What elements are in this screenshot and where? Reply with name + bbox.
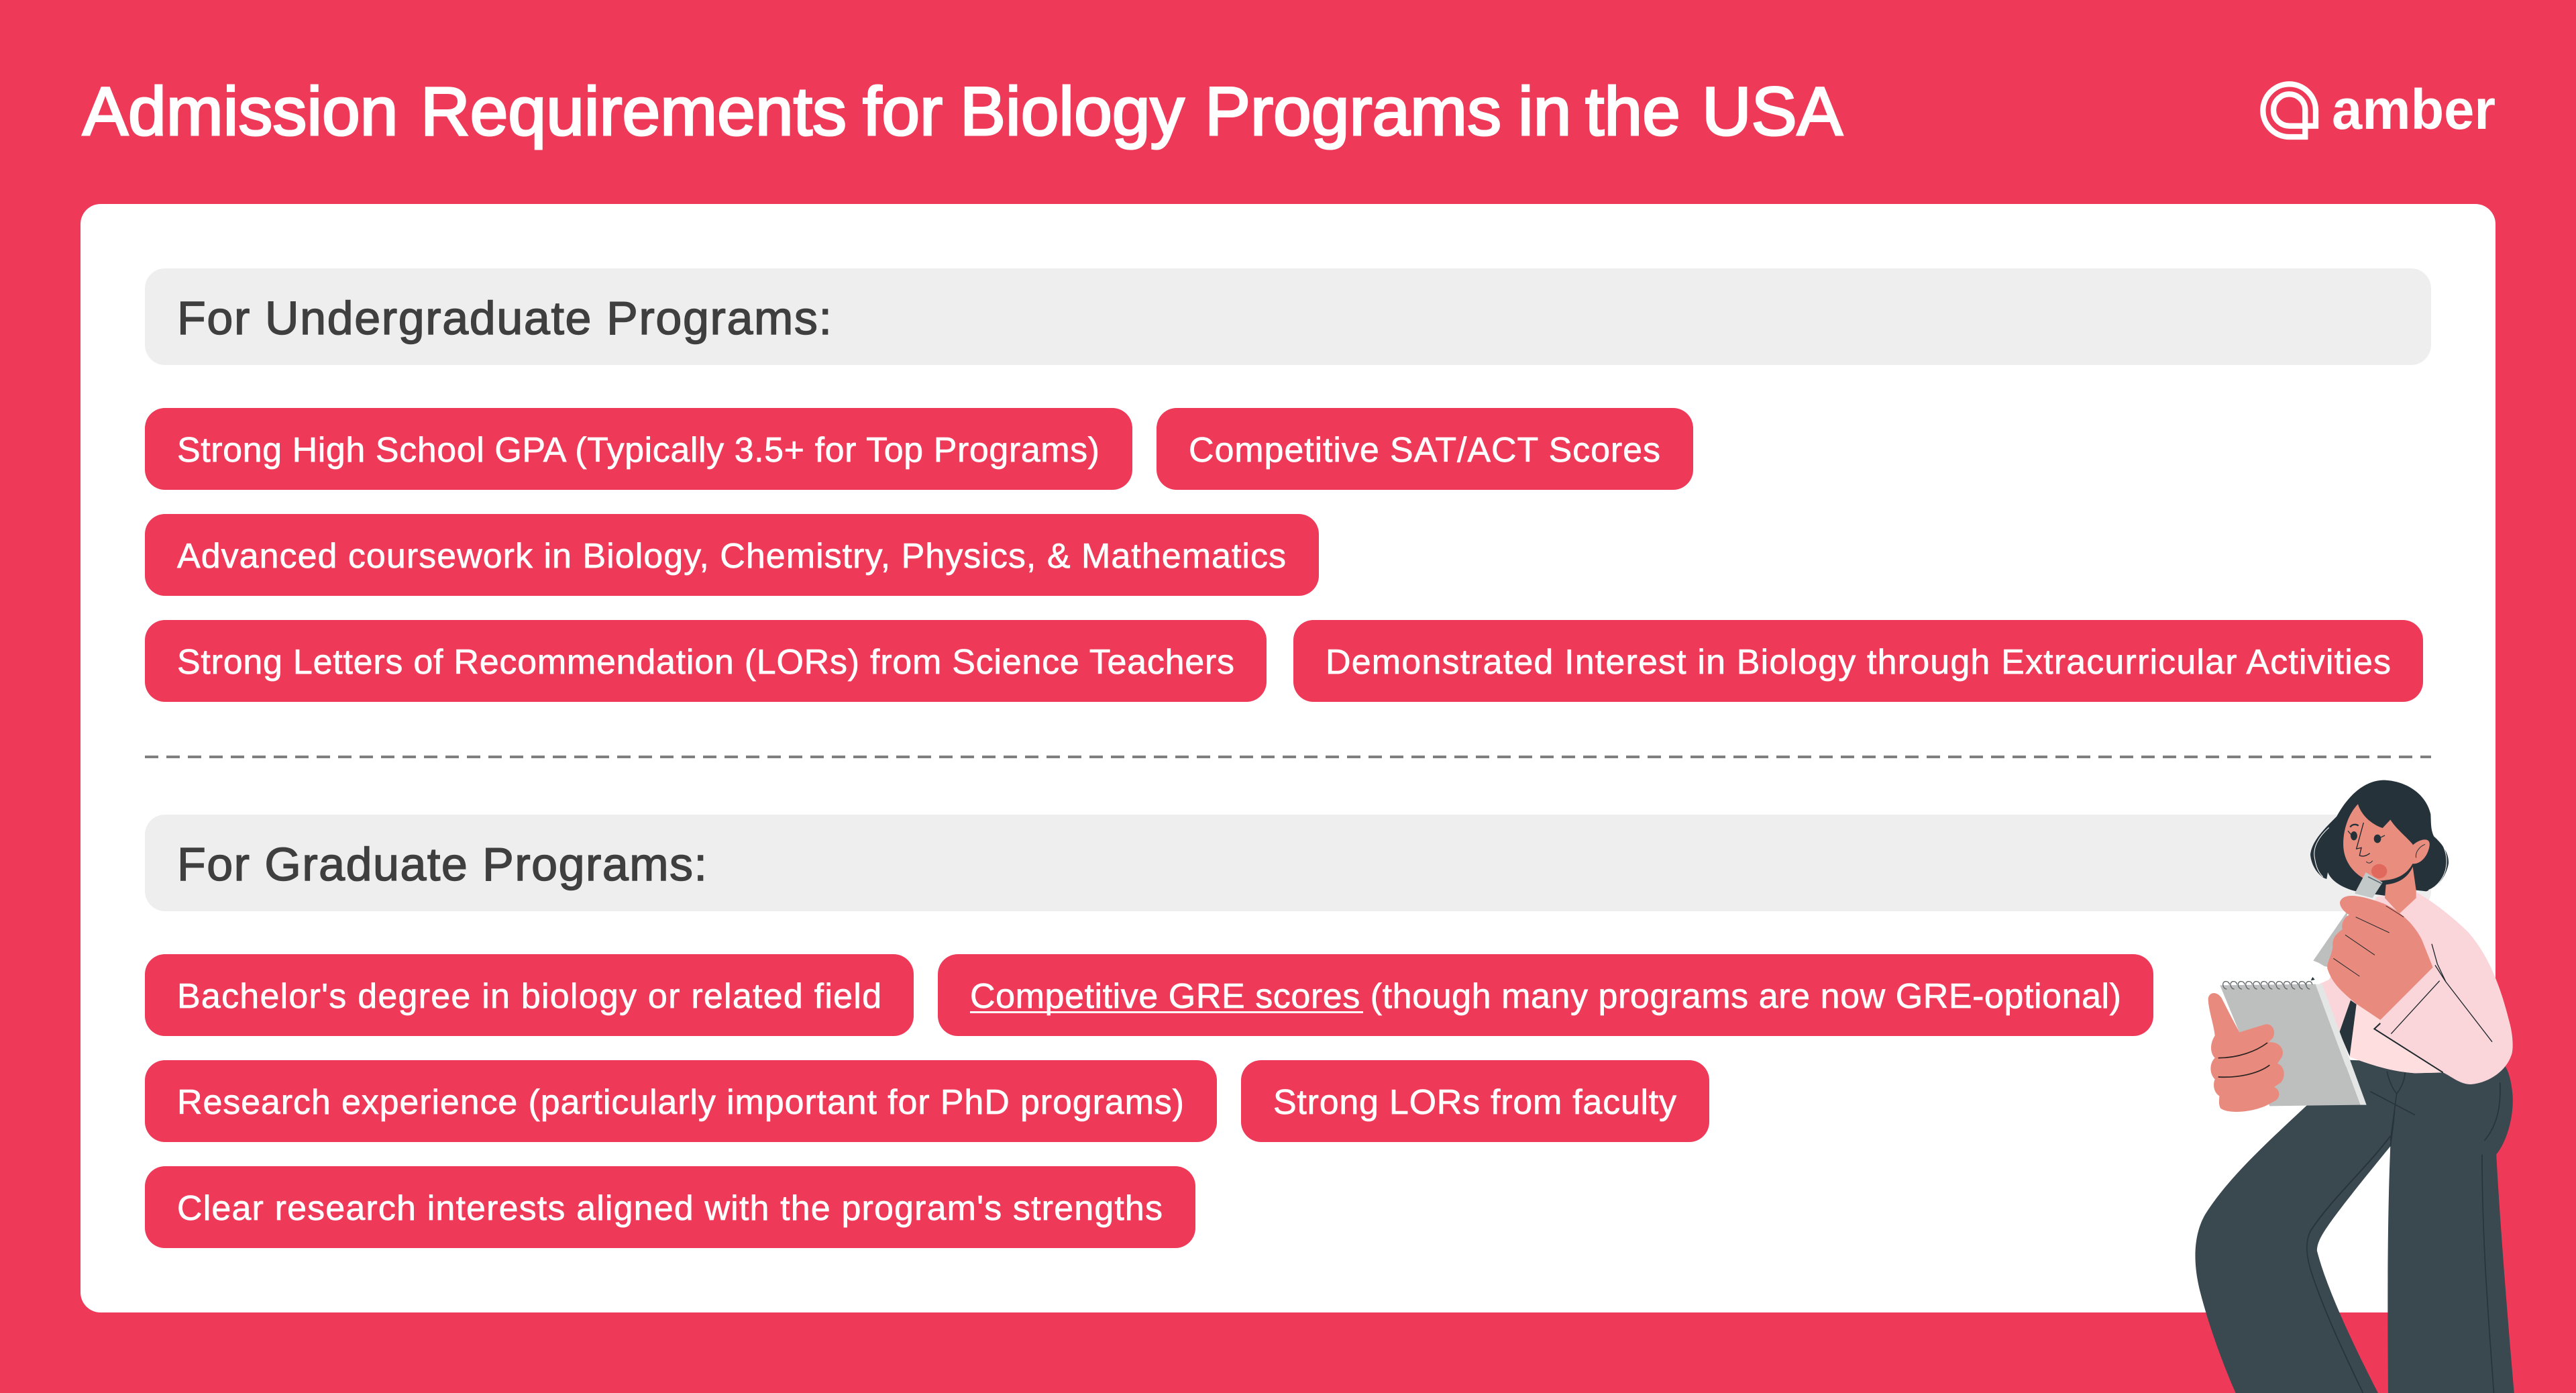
title: Biology [960,73,1185,150]
title: the [1585,73,1680,150]
mouth shade [2371,864,2387,878]
pants [2195,1060,2514,1393]
shirt [2316,891,2513,1084]
requirement pill: coursework: Advanced coursework in Biology, Chemistry, Physics, & Mathematics [177,537,1286,576]
panel: undergraduate programs [145,268,2431,702]
icon: amber logo mark [2263,84,2316,140]
title: USA [1702,73,1843,150]
upper hand [2327,896,2433,1020]
requirement pill: extracurricular: Demonstrated Interest in Biology through Extracurricular Activities [1326,643,2391,682]
neck [2385,867,2416,914]
pen [2355,872,2383,898]
requirement pill: research [145,1060,1217,1142]
head [2310,780,2449,914]
requirement pill: GPA [145,408,1132,490]
facial features [2348,823,2385,863]
requirement pill: extracurricular [1293,620,2423,702]
requirement pill: GPA: Strong High School GPA (Typically 3.5+ for Top Programs) [177,431,1099,470]
heading: undergraduate: For Undergraduate Programs: [177,292,832,344]
requirement pill: coursework [145,514,1319,596]
title: for [863,73,943,150]
heading: undergraduate [145,268,2431,365]
lower hand [2208,993,2284,1112]
illustration: woman with notepad [2195,780,2514,1393]
torn paper [2313,911,2348,968]
requirement pill: faculty LORs: Strong LORs from faculty [1273,1083,1676,1122]
heading: graduate [145,815,2431,911]
requirement pill: GRE: Competitive GRE scores (though many programs are now GRE-optional) [970,977,2121,1016]
requirement pill: bachelor's: Bachelor's degree in biology or related field [177,977,881,1016]
requirement pill: research interests [145,1166,1195,1248]
pants details [2370,1072,2500,1141]
title: Requirements [421,73,847,150]
requirement pill: research: Research experience (particularly important for PhD programs) [177,1083,1184,1122]
notepad [2220,977,2367,1106]
hair [2310,780,2449,896]
panel: graduate programs [145,815,2431,1248]
hand props group [2208,872,2433,1112]
requirement pill: LORs: Strong Letters of Recommendation (LORs) from Science Teachers [177,643,1234,682]
face [2343,804,2413,881]
panel: white card [80,204,2496,1312]
requirement pill: faculty LORs [1241,1060,1709,1142]
title: Admission [83,73,398,150]
requirement pill: LORs [145,620,1267,702]
heading: graduate: For Graduate Programs: [177,838,707,890]
requirement pill: SAT/ACT: Competitive SAT/ACT Scores [1189,431,1660,470]
requirement pill: GRE [938,954,2153,1036]
title: Programs [1205,73,1501,150]
requirement pill: research interests: Clear research interests aligned with the program's strengths [177,1189,1163,1228]
logo: amber [2263,78,2496,141]
ear [2412,839,2430,864]
title: in [1518,73,1571,150]
logo wordmark: amber [2332,78,2496,141]
requirement pill: SAT/ACT [1157,408,1693,490]
requirement pill: bachelor's [145,954,914,1036]
torso and arm group [2316,891,2513,1141]
